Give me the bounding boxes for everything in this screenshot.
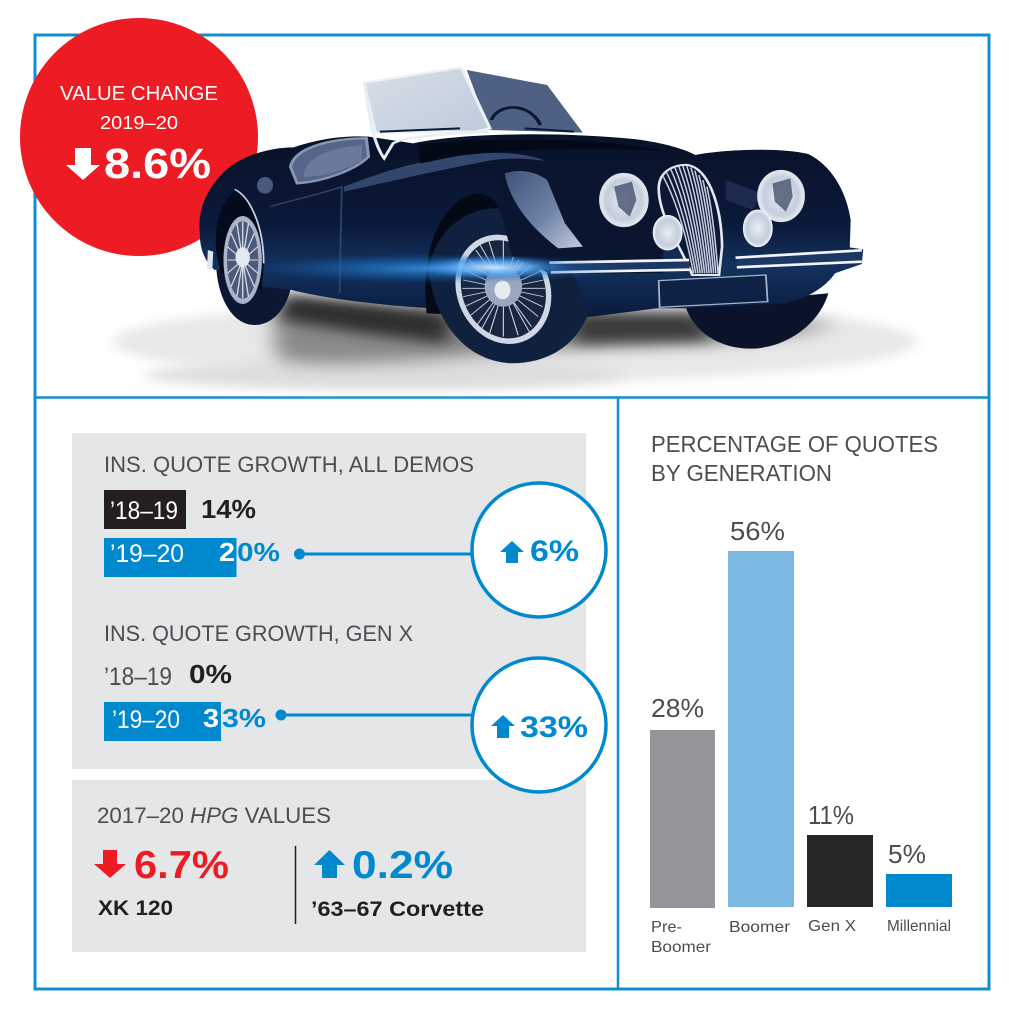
heading: gen x: INS. QUOTE GROWTH, GEN X — [104, 621, 413, 646]
rear wire wheel — [223, 216, 262, 304]
right fender reflection — [726, 180, 761, 210]
front wheel arch — [425, 193, 547, 320]
value: xk 120: 6.7% — [134, 844, 229, 887]
cowl shadow — [418, 140, 668, 163]
icon: up arrow — [491, 715, 515, 738]
value: 6 percent: 6% — [530, 535, 579, 568]
panel: hpg values — [72, 780, 586, 952]
heading: percentage of quotes: BY GENERATION — [651, 460, 832, 486]
row: gen x 18-19 — [104, 659, 232, 691]
blue light streak — [252, 253, 627, 283]
car illustration — [113, 67, 917, 390]
badge label: VALUE CHANGE — [60, 83, 218, 105]
bar: gen x 19-20: 3 — [203, 703, 219, 733]
bar: boomer: Boomer — [729, 919, 791, 936]
windshield — [364, 67, 490, 133]
bar: pre-boomer: 28% — [651, 693, 704, 723]
heading: percentage of quotes: PERCENTAGE OF QUOTES — [651, 431, 938, 457]
fender reflection — [505, 171, 583, 248]
value change badge — [20, 18, 258, 256]
bar: all demos 18-19: 14% — [201, 494, 256, 524]
bar: millennial — [886, 839, 952, 935]
icon: down arrow — [66, 148, 100, 180]
bar: pre-boomer — [650, 693, 715, 956]
connector: gen x — [276, 710, 475, 720]
bar: all demos 19-20: ’19–20 — [110, 540, 184, 568]
bar: pre-boomer: Boomer — [651, 939, 712, 956]
bar: gen x 19-20 — [104, 702, 266, 741]
body lines — [270, 187, 342, 293]
bar: all demos 18-19 — [104, 490, 256, 529]
row: gen x 18-19: 0% — [189, 659, 232, 689]
heading: hpg values: 2017–20 HPG VALUES — [97, 803, 331, 828]
callout: up 33 percent — [472, 658, 606, 792]
badge value: 8.6% — [104, 140, 211, 188]
value: corvette: 0.2% — [352, 844, 453, 887]
grille — [659, 165, 722, 275]
heading: percentage of quotes — [651, 431, 938, 486]
value: 33 percent: 33% — [520, 711, 588, 744]
row: gen x 18-19: ’18–19 — [104, 663, 172, 691]
rear tyre — [216, 203, 292, 325]
icon: up arrow — [500, 541, 524, 563]
rear deck highlight — [257, 177, 273, 194]
number plate — [659, 275, 768, 307]
bar: gen x — [807, 800, 873, 935]
icon: blue up arrow — [314, 850, 345, 878]
bar: all demos 19-20: 2 — [219, 537, 235, 567]
label: corvette: ’63–67 Corvette — [311, 898, 484, 921]
bumpers — [549, 249, 862, 273]
rear wheel arch — [216, 192, 264, 290]
bar: gen x: 11% — [808, 800, 854, 830]
icon: red down arrow — [94, 850, 126, 878]
connector: all demos — [294, 548, 475, 560]
bar: gen x: Gen X — [808, 918, 856, 935]
rear cockpit panel — [467, 70, 583, 133]
callout: up 6 percent — [472, 483, 606, 617]
front right tyre — [686, 293, 828, 349]
headlamps — [601, 171, 803, 250]
bar: gen x 19-20: ’19–20 — [112, 706, 180, 734]
interior seat — [290, 138, 369, 183]
badge years: 2019–20 — [100, 112, 178, 133]
front wire wheel — [446, 230, 560, 349]
label: xk 120: XK 120 — [98, 897, 173, 920]
bar: boomer: 56% — [730, 516, 785, 546]
bar: millennial: Millennial — [887, 918, 951, 935]
heading: all demos: INS. QUOTE GROWTH, ALL DEMOS — [104, 452, 474, 477]
ground shadow — [113, 293, 917, 390]
bar: gen x 19-20: 3% — [222, 703, 266, 733]
front tyre — [429, 208, 587, 363]
bar: all demos 19-20: 0% — [237, 537, 280, 567]
bar: all demos 19-20 — [104, 537, 280, 577]
panel: quote growth — [72, 433, 586, 769]
bar chart: quotes by generation — [650, 516, 952, 956]
bar: boomer — [728, 516, 794, 936]
bar: millennial: 5% — [888, 839, 926, 869]
car body — [199, 134, 863, 317]
fender top highlight — [344, 153, 547, 192]
front fender over wheel — [496, 160, 663, 273]
bar: all demos 18-19: ’18–19 — [110, 497, 178, 525]
bar: pre-boomer: Pre- — [651, 919, 682, 936]
